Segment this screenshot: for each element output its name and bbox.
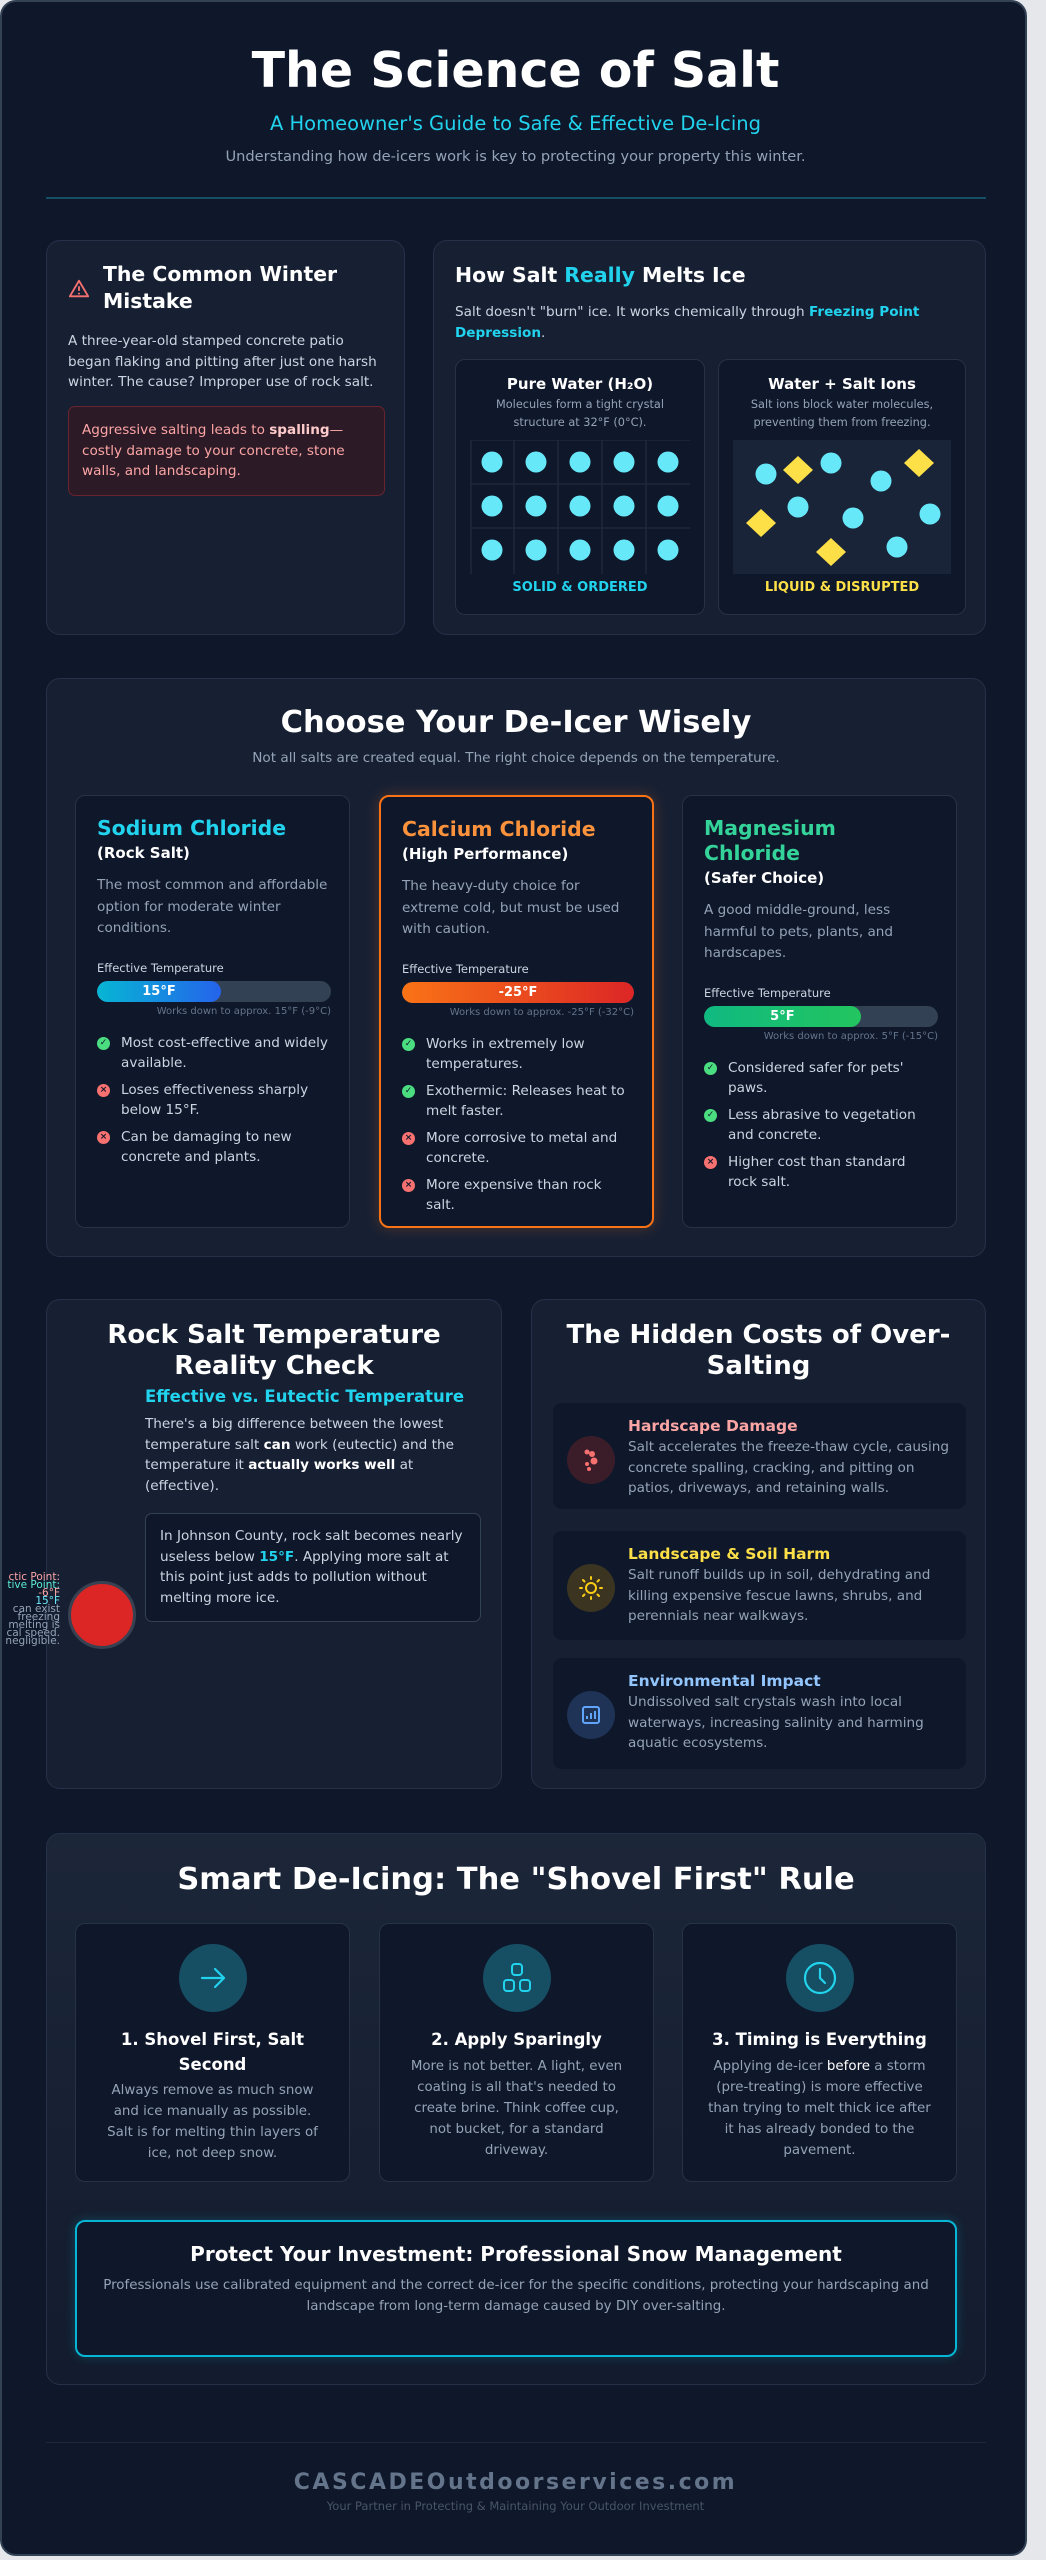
- card: sodium chloride: Loses effectiveness sharply below 15°F.: [121, 1082, 308, 1118]
- card: calcium chloride: ×: [405, 1180, 412, 1190]
- card: step 1: [75, 1923, 350, 2182]
- tagline: Understanding how de-icers work is key to protecting your property this winter.: [225, 148, 806, 165]
- subheading: Effective vs. Eutectic Temperature: [145, 1387, 464, 1406]
- panel: temperature reality check: [46, 1299, 502, 1789]
- chart: thermometer bulb: 15°F: [35, 1595, 60, 1607]
- callout: spalling: Aggressive salting leads to spalling—costly damage to your concrete, stone walls, and landscaping.: [82, 422, 345, 479]
- diagram: pure water: Pure Water (H₂O): [507, 375, 653, 393]
- item: landscape harm: Salt runoff builds up in soil, dehydrating and killing expensive fescue lawns, shrubs, and perennials near walkways.: [628, 1567, 930, 1624]
- card: magnesium chloride: (Safer Choice): [704, 869, 824, 887]
- text block: There's a big difference between the lowest temperature salt can work (eutectic) and the temperature it actually works well at (effective).: [145, 1416, 454, 1494]
- card: step 2: [379, 1923, 654, 2182]
- icon: chart: [567, 1691, 615, 1739]
- icon: clock: [786, 1944, 854, 2012]
- card: calcium chloride: More expensive than rock salt.: [426, 1177, 602, 1213]
- diagram: water + salt ions: preventing them from freezing.: [753, 416, 931, 429]
- card: calcium chloride: ✓: [405, 1086, 412, 1096]
- chart: disrupted ions: [733, 440, 951, 574]
- item: landscape harm: [553, 1531, 966, 1640]
- card: magnesium chloride: Magnesium Chloride: [704, 816, 836, 865]
- icon: hardscape: [567, 1436, 615, 1484]
- chart: thermometer bulb: freezing: [18, 1611, 60, 1623]
- card: sodium chloride: The most common and affordable option for moderate winter conditions.: [97, 877, 327, 936]
- card: magnesium chloride: ×: [707, 1157, 714, 1167]
- chart: thermometer bulb: melting is: [8, 1619, 60, 1631]
- callout: johnson county: In Johnson County, rock salt becomes nearly useless below 15°F. Applying more salt at this point just adds to pollution without melting more ice.: [160, 1528, 463, 1606]
- chart: thermometer bulb: can exist: [13, 1603, 60, 1615]
- footer: Your Partner in Protecting & Maintaining Your Outdoor Investment: [327, 2499, 704, 2513]
- heading: Mistake: [103, 289, 193, 313]
- icon: sun: [567, 1564, 615, 1612]
- card: magnesium chloride: Less abrasive to vegetation and concrete.: [728, 1107, 916, 1143]
- diagram: water + salt ions: Salt ions block water molecules,: [751, 398, 933, 411]
- bar: 5F: 5°F: [770, 1009, 795, 1024]
- card: calcium chloride: [379, 795, 654, 1228]
- chart: thermometer bulb: cal speed.: [6, 1627, 60, 1639]
- item: hardscape damage: [553, 1403, 966, 1509]
- card: calcium chloride: ×: [405, 1133, 412, 1143]
- card: magnesium chloride: Effective Temperature: [704, 986, 831, 1000]
- heading: [566, 1320, 950, 1381]
- diagram: pure water: structure at 32°F (0°C).: [513, 416, 647, 429]
- card: calcium chloride: ✓: [405, 1039, 412, 1049]
- heading: The Hidden Costs of Over-: [567, 1320, 950, 1350]
- heading: The Common Winter: [103, 262, 337, 286]
- panel: choose your de-icer: Not all salts are created equal. The right choice depends on the temperature.: [252, 750, 780, 766]
- bar: 15F: [97, 981, 331, 1002]
- card: calcium chloride: Exothermic: Releases heat to melt faster.: [426, 1083, 625, 1119]
- panel: hidden costs: [531, 1299, 986, 1789]
- bar: 15F: 15°F: [142, 984, 176, 999]
- panel: choose your de-icer: [46, 678, 986, 1257]
- card: step 2: 2. Apply Sparingly: [431, 2030, 602, 2049]
- card: magnesium chloride: [682, 795, 957, 1228]
- card: sodium chloride: (Rock Salt): [97, 844, 190, 862]
- panel: how salt melts ice: [433, 240, 986, 635]
- bar: 5F: [704, 1006, 938, 1027]
- card: step 1: Always remove as much snow and ice manually as possible. Salt is for melting thin layers of ice, not deep snow.: [107, 2083, 318, 2161]
- card: magnesium chloride: ✓: [707, 1110, 714, 1120]
- card: step 3: 3. Timing is Everything: [712, 2030, 927, 2049]
- callout: spalling: [68, 406, 385, 496]
- card: magnesium chloride: Works down to approx. 5°F (-15°C): [764, 1031, 938, 1042]
- item: landscape harm: Landscape & Soil Harm: [628, 1545, 830, 1563]
- item: environmental impact: Undissolved salt crystals wash into local waterways, increasing salinity and harming aquatic ecosystems.: [628, 1694, 924, 1751]
- panel: common winter mistake: [46, 240, 405, 635]
- card: sodium chloride: Works down to approx. 15°F (-9°C): [157, 1006, 331, 1017]
- icon: warning: [68, 280, 90, 298]
- diagram: pure water: [455, 359, 705, 615]
- icon: arrow: [179, 1944, 247, 2012]
- callout: professional snow management: Protect Your Investment: Professional Snow Management: [190, 2242, 842, 2266]
- title: The Science of Salt: [252, 42, 779, 99]
- heading: Salting: [707, 1351, 810, 1381]
- card: calcium chloride: The heavy-duty choice for extreme cold, but must be used with caution.: [402, 878, 619, 937]
- bar: -25F: [402, 982, 634, 1003]
- card: sodium chloride: Sodium Chloride: [97, 816, 286, 840]
- footer: CASCADEOutdoorservices.com: [294, 2470, 737, 2495]
- card: magnesium chloride: ✓: [707, 1063, 714, 1073]
- item: hardscape damage: Hardscape Damage: [628, 1417, 798, 1435]
- bar: -25F: -25°F: [499, 985, 537, 1000]
- icon: shapes: [483, 1944, 551, 2012]
- chart: thermometer bulb: -6°F: [38, 1587, 60, 1599]
- heading: Smart De-Icing: The "Shovel First" Rule: [177, 1862, 855, 1897]
- diagram: pure water: SOLID & ORDERED: [512, 580, 648, 595]
- card: sodium chloride: Effective Temperature: [97, 961, 224, 975]
- card: calcium chloride: Effective Temperature: [402, 962, 529, 976]
- card: sodium chloride: Can be damaging to new concrete and plants.: [121, 1129, 292, 1165]
- chart: thermometer bulb: tive Point:: [7, 1579, 60, 1591]
- card: magnesium chloride: Higher cost than standard rock salt.: [728, 1154, 906, 1190]
- card: step 1: 1. Shovel First, Salt Second: [121, 2030, 304, 2074]
- heading: Reality Check: [174, 1351, 374, 1381]
- chart: thermometer bulb: negligible.: [5, 1635, 60, 1647]
- card: sodium chloride: ×: [100, 1085, 107, 1095]
- diagram: water + salt ions: Water + Salt Ions: [768, 375, 916, 393]
- heading: How Salt Really Melts Ice: [455, 263, 746, 287]
- chart: crystal grid: [470, 440, 690, 574]
- card: sodium chloride: ✓: [100, 1038, 107, 1048]
- card: calcium chloride: Calcium Chloride: [402, 817, 596, 841]
- heading: [107, 1320, 441, 1381]
- diagram: water + salt ions: [718, 359, 966, 615]
- card: calcium chloride: More corrosive to metal and concrete.: [426, 1130, 617, 1166]
- chart: thermometer bulb: [5, 1571, 136, 1649]
- panel: shovel first rule: [46, 1833, 986, 2385]
- card: calcium chloride: Works in extremely low temperatures.: [426, 1036, 585, 1072]
- callout: johnson county: [145, 1513, 481, 1622]
- card: calcium chloride: Works down to approx. -25°F (-32°C): [450, 1007, 634, 1018]
- callout: professional snow management: [75, 2220, 957, 2357]
- item: environmental impact: Environmental Impact: [628, 1672, 821, 1690]
- heading: [103, 262, 337, 313]
- diagram: water + salt ions: LIQUID & DISRUPTED: [765, 580, 919, 595]
- card: magnesium chloride: A good middle-ground, less harmful to pets, plants, and hardscapes.: [704, 902, 893, 961]
- text block: Salt doesn't "burn" ice. It works chemically through Freezing Point Depression.: [455, 304, 919, 341]
- diagram: pure water: Molecules form a tight crystal: [496, 398, 664, 411]
- subtitle: A Homeowner's Guide to Safe & Effective De-Icing: [270, 112, 761, 135]
- item: hardscape damage: Salt accelerates the freeze-thaw cycle, causing concrete spalling, cracking, and pitting on patios, driveways, and retaining walls.: [628, 1439, 949, 1496]
- heading: Choose Your De-Icer Wisely: [281, 705, 751, 740]
- heading: Rock Salt Temperature: [107, 1320, 441, 1350]
- card: sodium chloride: ×: [100, 1132, 107, 1142]
- card: calcium chloride: (High Performance): [402, 845, 568, 863]
- text block: A three-year-old stamped concrete patio began flaking and pitting after just one harsh winter. The cause? Improper use of rock salt.: [68, 333, 377, 390]
- chart: thermometer bulb: ctic Point:: [8, 1571, 60, 1583]
- item: environmental impact: [553, 1658, 966, 1769]
- callout: professional snow management: Professionals use calibrated equipment and the correct de-icer for the specific conditions, protecting your hardscaping and landscape from long-term damage caused by DIY over-salting.: [103, 2278, 929, 2314]
- card: step 3: Applying de-icer before a storm (pre-treating) is more effective than trying to melt thick ice after it has already bonded to the pavement.: [708, 2058, 931, 2158]
- card: sodium chloride: Most cost-effective and widely available.: [121, 1035, 328, 1071]
- card: step 3: [682, 1923, 957, 2182]
- card: magnesium chloride: Considered safer for pets' paws.: [728, 1060, 904, 1096]
- card: sodium chloride: [75, 795, 350, 1228]
- card: step 2: More is not better. A light, even coating is all that's needed to create brine. Think coffee cup, not bucket, for a standard driveway.: [411, 2058, 622, 2158]
- footer: [294, 2470, 737, 2513]
